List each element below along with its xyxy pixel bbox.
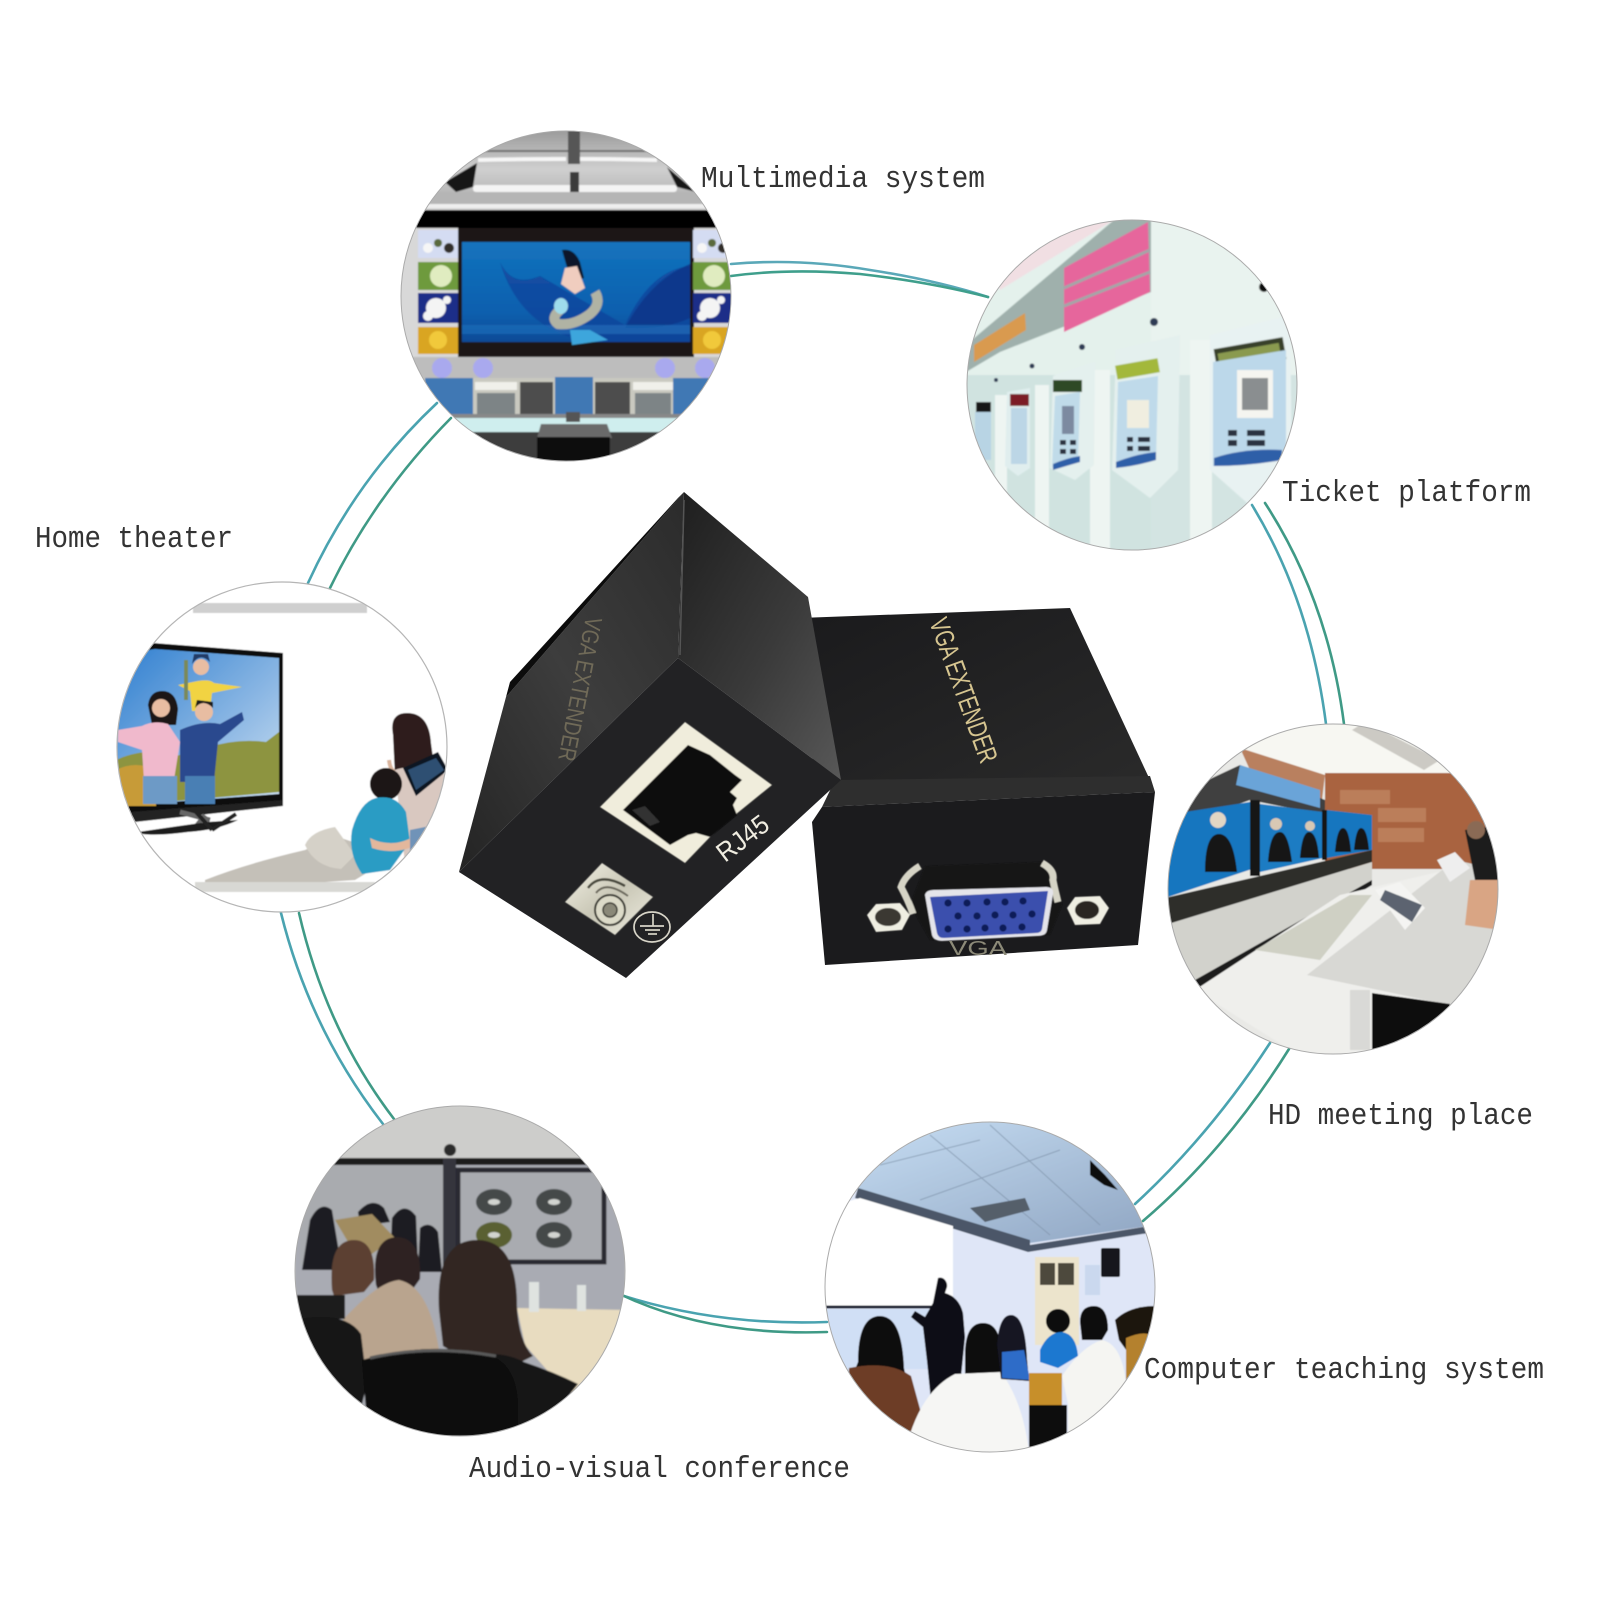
photo circle: home theater [116, 582, 448, 914]
front face [459, 658, 841, 978]
device: VGA extender (right unit) [800, 608, 1155, 965]
photo circle: audio-visual conference [295, 1106, 630, 1436]
photo circle: multimedia system [400, 130, 732, 464]
connector shell [925, 887, 1053, 941]
ticket machines [968, 336, 1296, 550]
label: Ticket platform: Ticket platform [1282, 476, 1531, 511]
label: Computer teaching system: Computer teaching system [1144, 1353, 1544, 1388]
top face [800, 608, 1150, 785]
arc: ticket to HD meeting [1252, 503, 1344, 724]
label: HD meeting place: HD meeting place [1268, 1099, 1533, 1134]
side tiles left [418, 230, 458, 354]
ground symbol [634, 912, 670, 942]
audience [847, 1306, 1155, 1452]
label: Home theater: Home theater [35, 522, 233, 557]
faded label: VGA EXTENDER [552, 615, 607, 763]
arc: audio-visual to home theater [281, 913, 394, 1124]
arc: multimedia to ticket [731, 262, 988, 297]
thumbscrews [867, 903, 910, 932]
label: Audio-visual conference: Audio-visual conference [469, 1452, 850, 1487]
connecting ring [281, 262, 1344, 1332]
RJ45 port [600, 722, 772, 863]
family on screen [118, 654, 244, 804]
VGA port [867, 862, 1109, 941]
front face [812, 792, 1155, 965]
arc: computer teaching to audio-visual [624, 1296, 827, 1332]
ground screw [565, 863, 653, 935]
arc: home theater to multimedia [308, 403, 451, 588]
edge flap [506, 492, 684, 697]
label: Multimedia system: Multimedia system [701, 162, 985, 197]
photo circle: HD meeting place [1165, 720, 1501, 1056]
bracket [910, 862, 1062, 940]
side tiles right [693, 230, 732, 354]
VGA port label: VGA [949, 938, 1008, 960]
arc: HD meeting to computer teaching [1135, 1043, 1289, 1221]
RJ45 label: RJ45 [711, 809, 775, 868]
left side face [459, 492, 684, 872]
fold band [822, 776, 1155, 807]
carpet and seated viewers [205, 713, 448, 890]
teacher [911, 1278, 965, 1401]
photo circle: ticket platform [966, 218, 1306, 560]
VGA pin holes [944, 897, 1036, 933]
printed label on top: VGA EXTENDER [923, 614, 1004, 767]
photo circle: computer teaching system [825, 1122, 1155, 1452]
device: VGA extender (left unit) [459, 492, 841, 978]
right side face [678, 492, 841, 780]
